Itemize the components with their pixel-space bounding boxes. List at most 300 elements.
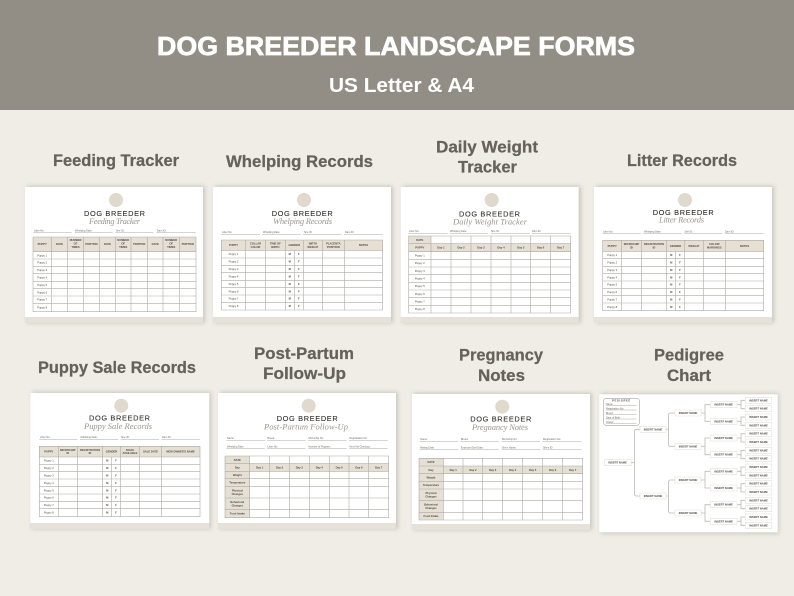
heading: Pedigree Chart: Pedigree xyxy=(654,346,724,364)
logo badge xyxy=(109,193,123,207)
heading: Feeding Tracker: Feeding Tracker xyxy=(53,151,179,170)
info box: PEDIGREE xyxy=(612,398,631,402)
table: Puppy 7 xyxy=(229,297,239,301)
table: NOTES xyxy=(740,244,749,248)
table xyxy=(225,456,389,518)
table: Puppy 5 xyxy=(44,488,54,492)
panel: pedigree chart xyxy=(599,393,779,534)
info box: Registration No: xyxy=(606,407,624,410)
table: Puppy 6 xyxy=(229,289,239,293)
table: Temperature xyxy=(423,483,440,487)
table: F xyxy=(679,283,681,287)
table: GENDER xyxy=(670,244,681,248)
pedigree name labels: INSERT NAME xyxy=(714,519,733,523)
table: NUMBER xyxy=(70,238,81,242)
form fields: Next Vet Checkup: xyxy=(350,445,371,448)
panel: whelping records form xyxy=(213,186,393,323)
table: F xyxy=(679,253,681,257)
table: F xyxy=(679,275,681,279)
table: M xyxy=(289,274,292,278)
subtitle: US Letter & A4 xyxy=(329,75,475,97)
table: M xyxy=(670,275,673,279)
table: Day 3 xyxy=(489,468,497,472)
pedigree name labels: INSERT NAME xyxy=(714,453,733,457)
form fields: Mating Date: xyxy=(420,446,435,449)
form fields xyxy=(603,230,764,234)
table: Food Intake xyxy=(423,514,439,518)
form fields: Litter No: xyxy=(603,230,613,233)
table: M xyxy=(670,260,673,264)
form fields: Litter No: xyxy=(222,231,232,234)
table: PLACENTA xyxy=(326,242,341,246)
table: Puppy 1 xyxy=(44,459,54,463)
pedigree name labels: INSERT NAME xyxy=(714,486,733,490)
form fields: Whelping Date: xyxy=(75,230,92,232)
table: F xyxy=(115,503,117,507)
pedigree name labels: INSERT NAME xyxy=(714,419,733,423)
form title: DOG BREEDER xyxy=(84,209,145,218)
table: COLLAR xyxy=(250,242,261,246)
script subtitle: Puppy Sale Records xyxy=(83,421,153,431)
table: Day 2 xyxy=(276,465,284,469)
table: Puppy 4 xyxy=(607,275,618,279)
table: Day 3 xyxy=(296,465,303,469)
form fields: Dam ID: xyxy=(725,230,734,233)
pedigree name labels: INSERT NAME xyxy=(749,448,768,452)
table: M xyxy=(289,304,292,308)
form fields: Name: xyxy=(420,438,428,441)
table: Puppy 7 xyxy=(607,297,618,301)
pedigree name labels: INSERT NAME xyxy=(749,523,768,527)
table: M xyxy=(106,511,109,515)
banner xyxy=(0,0,794,110)
table: PORTION xyxy=(182,242,194,246)
table: Puppy 5 xyxy=(607,283,618,287)
table: Puppy 6 xyxy=(607,290,618,294)
pedigree name labels: INSERT NAME xyxy=(608,461,627,465)
form fields xyxy=(409,230,571,233)
pedigree name labels: INSERT NAME xyxy=(714,436,733,440)
form fields: Registration No: xyxy=(350,437,368,440)
table: Changes xyxy=(425,506,437,510)
table: M xyxy=(106,503,109,507)
table: Puppy 7 xyxy=(37,298,48,302)
logo badge xyxy=(485,193,499,207)
table: Puppy 5 xyxy=(37,283,48,287)
script subtitle: Feeding Tracker xyxy=(88,216,141,226)
table: F xyxy=(679,305,681,309)
panel: post-partum follow-up form xyxy=(218,392,398,529)
form fields: Sire's ID: xyxy=(543,446,553,449)
form fields: Sire ID: xyxy=(116,230,125,232)
pedigree name labels: INSERT NAME xyxy=(644,427,662,431)
form fields: Whelping Date: xyxy=(450,230,467,233)
table: GENDER xyxy=(106,450,117,454)
table: Day xyxy=(429,468,434,472)
table xyxy=(33,237,196,312)
info box: Owner: xyxy=(606,421,614,424)
table: PUPPY xyxy=(229,243,238,247)
table: Day 4 xyxy=(509,468,517,472)
form fields: Number of Puppies: xyxy=(308,445,331,448)
table: M xyxy=(289,252,292,256)
panel: daily weight tracker form xyxy=(401,186,581,323)
table: NUMBER xyxy=(165,238,177,242)
table: F xyxy=(298,252,300,256)
heading: Daily Weight Tracker: Daily Weight xyxy=(436,138,538,156)
table: PUPPY xyxy=(38,242,47,246)
table: F xyxy=(115,488,117,492)
logo badge xyxy=(114,399,128,413)
table: Puppy 4 xyxy=(37,276,48,280)
table: DATE xyxy=(56,242,63,246)
table: M xyxy=(670,283,673,287)
form title: DOG BREEDER xyxy=(470,415,531,424)
table: Puppy 7 xyxy=(415,300,425,304)
logo badge xyxy=(297,193,311,207)
table: GENDER xyxy=(289,243,300,247)
table: Puppy 1 xyxy=(607,253,618,257)
table: NEW OWNER'S NAME xyxy=(166,450,195,454)
table: Changes xyxy=(232,492,243,496)
table: Day 6 xyxy=(355,465,363,469)
table: Day 6 xyxy=(549,468,557,472)
table: Day 6 xyxy=(537,246,545,250)
info box: Breed: xyxy=(606,412,614,415)
panel: litter records form xyxy=(594,186,774,323)
form fields xyxy=(420,438,581,450)
table: COLOR xyxy=(251,245,260,249)
table: BIRTH xyxy=(309,242,317,246)
form fields: Litter No: xyxy=(34,230,44,232)
table: Day 2 xyxy=(469,468,477,472)
table: TIMES xyxy=(119,245,128,249)
heading: Pedigree Chart: Chart xyxy=(667,366,711,385)
heading: Daily Weight Tracker: Tracker xyxy=(458,158,517,176)
table: ID xyxy=(89,451,91,455)
form fields: Whelping Date: xyxy=(227,445,244,448)
script subtitle: Pregnancy Notes xyxy=(471,422,529,432)
table: POSITION xyxy=(327,245,340,249)
table: PORTION xyxy=(85,242,98,246)
table: Puppy 3 xyxy=(37,268,48,272)
pedigree name labels: INSERT NAME xyxy=(749,457,768,461)
table: F xyxy=(679,290,681,294)
table: Puppy 3 xyxy=(44,473,54,477)
pedigree name labels: INSERT NAME xyxy=(749,415,768,419)
table: TIME OF xyxy=(270,242,281,246)
table: F xyxy=(115,496,117,500)
table: Day 4 xyxy=(316,465,323,469)
logo badge xyxy=(678,193,692,207)
table: Puppy 8 xyxy=(607,305,618,309)
table: Weight xyxy=(427,475,436,479)
table: F xyxy=(298,274,300,278)
table: ID xyxy=(630,245,633,249)
form fields: Dam ID: xyxy=(162,436,171,439)
table: Puppy 8 xyxy=(229,304,239,308)
table: M xyxy=(106,488,109,492)
table: Day 2 xyxy=(457,246,465,250)
form fields: Whelping Date: xyxy=(263,231,280,234)
table: Puppy 6 xyxy=(44,496,54,500)
form fields: Whelping Date: xyxy=(644,230,661,233)
table: Changes xyxy=(425,495,437,499)
table: Behavioral xyxy=(424,503,438,507)
form fields: Litter No: xyxy=(40,436,50,439)
table: TIMES xyxy=(167,245,176,249)
table: NOTES xyxy=(359,243,368,247)
info box xyxy=(604,398,639,425)
pedigree name labels: INSERT NAME xyxy=(749,482,768,486)
pedigree name labels: INSERT NAME xyxy=(714,469,733,473)
table: Day 7 xyxy=(557,246,565,250)
table: F xyxy=(115,459,117,463)
table: Day xyxy=(235,465,240,469)
table: F xyxy=(298,260,300,264)
table: M xyxy=(670,290,673,294)
table: AVAILABLE xyxy=(123,451,138,455)
table: M xyxy=(106,481,109,485)
heading: Puppy Sale Records: Puppy Sale Records xyxy=(38,358,196,377)
table: F xyxy=(298,304,300,308)
table: F xyxy=(679,268,681,272)
table: M xyxy=(670,268,673,272)
table: PUPPY xyxy=(415,246,425,250)
heading: Pregnancy Notes xyxy=(459,346,544,385)
logo badge xyxy=(302,399,316,413)
table: Puppy 2 xyxy=(37,261,48,265)
connector lines xyxy=(631,400,745,525)
table: Puppy 1 xyxy=(415,254,425,258)
form fields xyxy=(39,436,200,439)
table: F xyxy=(298,297,300,301)
table: BIRTH xyxy=(271,245,279,249)
table xyxy=(221,240,383,310)
script subtitle: Post-Partum Follow-Up xyxy=(263,421,348,431)
table: PUPPY xyxy=(608,244,617,248)
table: F xyxy=(298,289,300,293)
form fields: Sire ID: xyxy=(491,230,500,233)
table: Puppy 4 xyxy=(229,274,239,278)
table: SOLD/ xyxy=(126,448,134,452)
table: REGISTRATION xyxy=(80,448,100,452)
table: M xyxy=(106,466,109,470)
table: Puppy 1 xyxy=(37,253,48,257)
pedigree name labels: INSERT NAME xyxy=(714,503,733,507)
form fields: Registration No: xyxy=(543,438,561,441)
pedigree name labels: INSERT NAME xyxy=(749,473,768,477)
table: MICROCHIP xyxy=(60,448,76,452)
table: Puppy 3 xyxy=(229,267,239,271)
table: Day 1 xyxy=(450,468,457,472)
heading: Pedigree Chart xyxy=(654,346,724,385)
info box: Date of Birth: xyxy=(606,416,621,419)
pedigree name labels: INSERT NAME xyxy=(749,515,768,519)
info box: Name: xyxy=(606,403,614,406)
logo badge xyxy=(495,400,509,414)
form fields xyxy=(226,437,388,449)
table: Puppy 8 xyxy=(415,307,425,311)
table: M xyxy=(289,282,292,286)
table: Puppy 4 xyxy=(415,276,425,280)
pedigree name labels: INSERT NAME xyxy=(679,511,697,515)
table: Puppy 5 xyxy=(415,284,425,288)
pedigree name labels: INSERT NAME xyxy=(644,494,662,498)
script subtitle: Litter Records xyxy=(658,215,705,225)
pedigree name labels: INSERT NAME xyxy=(749,498,768,502)
form fields: Microchip No: xyxy=(502,438,518,441)
table: WEIGHT xyxy=(688,244,700,248)
table: Puppy 2 xyxy=(607,260,618,264)
form fields: Whelping Date: xyxy=(80,436,98,439)
table: COLOR/ xyxy=(709,242,720,246)
table xyxy=(419,458,583,520)
table: DATE xyxy=(152,242,159,246)
form title: DOG BREEDER xyxy=(277,414,338,423)
table: Physical xyxy=(232,488,243,492)
pedigree name labels: INSERT NAME xyxy=(679,411,697,415)
heading: Whelping Records: Whelping Records xyxy=(226,152,373,171)
form fields: Sire ID: xyxy=(684,230,693,233)
table: M xyxy=(106,496,109,500)
table: ID xyxy=(653,245,655,249)
table: MICROCHIP xyxy=(624,242,639,246)
table: M xyxy=(106,459,109,463)
pedigree name labels: INSERT NAME xyxy=(714,403,733,407)
heading: Pregnancy Notes: Pregnancy xyxy=(459,346,544,364)
pedigree name labels: INSERT NAME xyxy=(679,478,697,482)
pedigree name labels: INSERT NAME xyxy=(749,423,768,427)
table: Behavioral xyxy=(230,500,244,504)
pedigree name labels: INSERT NAME xyxy=(749,398,768,402)
form title: DOG BREEDER xyxy=(459,210,520,219)
table: Day 5 xyxy=(336,465,343,469)
table: Temperature xyxy=(229,480,246,484)
table: Day 5 xyxy=(529,468,537,472)
table: Puppy 7 xyxy=(44,503,54,507)
table: Puppy 2 xyxy=(415,261,425,265)
table xyxy=(603,240,764,311)
table: DATE xyxy=(234,458,241,462)
table: Puppy 8 xyxy=(44,511,54,515)
script subtitle: Whelping Records xyxy=(273,216,333,226)
heading: Post-Partum Follow-Up: Post-Partum xyxy=(254,344,354,363)
heading: Post-Partum Follow-Up: Follow-Up xyxy=(263,364,346,383)
pedigree name labels: INSERT NAME xyxy=(749,440,768,444)
pedigree name labels: INSERT NAME xyxy=(749,490,768,494)
table: REGISTRATION xyxy=(644,242,664,246)
script subtitle: Daily Weight Tracker xyxy=(452,216,528,226)
table: Physical xyxy=(426,491,437,495)
table: Day 7 xyxy=(375,465,383,469)
form fields: Dam ID: xyxy=(157,230,166,232)
table: DATE xyxy=(427,460,435,464)
table: DATE xyxy=(104,242,111,246)
table: M xyxy=(289,289,292,293)
form fields: Breed: xyxy=(268,437,275,440)
table: MARKINGS xyxy=(707,245,722,249)
table: F xyxy=(298,282,300,286)
table: Day 5 xyxy=(517,246,525,250)
form fields: Litter No: xyxy=(268,445,278,448)
table: F xyxy=(115,466,117,470)
panel: pregnancy notes form xyxy=(412,393,592,530)
table: Puppy 4 xyxy=(44,481,54,485)
table: Puppy 6 xyxy=(415,292,425,296)
table: M xyxy=(289,297,292,301)
table: M xyxy=(289,260,292,264)
table: M xyxy=(670,297,673,301)
heading: Post-Partum Follow-Up xyxy=(254,344,354,383)
panel: feeding tracker form xyxy=(25,186,205,323)
table: Puppy 6 xyxy=(37,290,48,294)
form fields: Sire's Name: xyxy=(502,446,517,449)
table: F xyxy=(679,260,681,264)
pedigree name labels: INSERT NAME xyxy=(749,465,768,469)
form fields: Sire ID: xyxy=(304,231,313,234)
table: F xyxy=(115,473,117,477)
table: Puppy 2 xyxy=(229,260,239,264)
table: Day 4 xyxy=(497,246,505,250)
table: OF xyxy=(169,242,173,246)
pedigree name labels: INSERT NAME xyxy=(679,444,697,448)
table: NUMBER xyxy=(117,238,129,242)
table: F xyxy=(115,511,117,515)
table: M xyxy=(106,473,109,477)
form fields: Dam ID: xyxy=(532,230,541,233)
table: Day 7 xyxy=(569,468,577,472)
form fields xyxy=(33,230,196,233)
form fields: Dam ID: xyxy=(345,231,354,234)
form fields xyxy=(221,231,383,234)
table: Puppy 1 xyxy=(229,252,239,256)
table: Changes xyxy=(232,504,243,508)
table: Puppy 5 xyxy=(229,282,239,286)
table: OF xyxy=(74,242,78,246)
pedigree name boxes xyxy=(604,397,772,528)
table: Day 1 xyxy=(256,465,264,469)
table: ID xyxy=(66,451,69,455)
table: Puppy 8 xyxy=(37,306,48,310)
table: OF xyxy=(121,242,125,246)
form fields: Breed: xyxy=(461,438,469,441)
heading: Litter Records: Litter Records xyxy=(627,151,737,170)
table: PORTION xyxy=(133,242,145,246)
form fields: Name: xyxy=(227,437,235,440)
table: SALE DATE xyxy=(143,450,158,454)
form title: DOG BREEDER xyxy=(272,209,333,218)
table: Weight xyxy=(233,473,242,477)
table: Puppy 3 xyxy=(415,269,425,273)
title: DOG BREEDER LANDSCAPE FORMS xyxy=(157,33,635,61)
pedigree name labels: INSERT NAME xyxy=(749,407,768,411)
form fields: Microchip No: xyxy=(308,437,324,440)
table: PUPPY xyxy=(44,450,54,454)
table: TIMES xyxy=(71,245,80,249)
pedigree name labels: INSERT NAME xyxy=(749,507,768,511)
table xyxy=(39,446,200,517)
heading: Daily Weight Tracker xyxy=(436,138,538,176)
table: Puppy 2 xyxy=(44,466,54,470)
table: M xyxy=(670,253,673,257)
pedigree name labels: INSERT NAME xyxy=(749,432,768,436)
table: M xyxy=(670,305,673,309)
table: M xyxy=(289,267,292,271)
table: Food Intake xyxy=(230,512,245,516)
table: WEIGHT xyxy=(307,245,319,249)
table xyxy=(409,236,571,313)
